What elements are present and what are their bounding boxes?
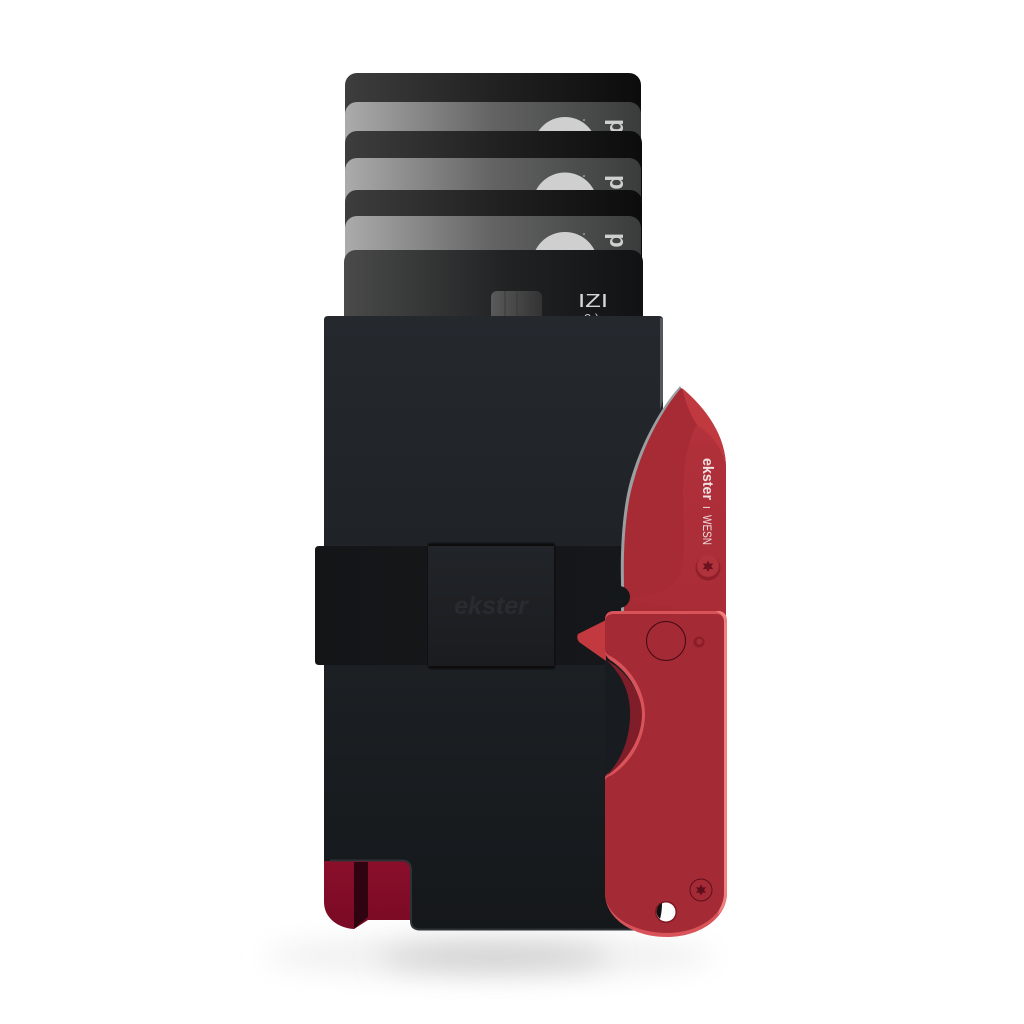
front card with chip	[344, 250, 643, 316]
wallet edge highlight	[660, 318, 663, 410]
product illustration	[296, 73, 727, 986]
handle rim	[605, 611, 727, 937]
wallet body	[324, 316, 663, 930]
elastic band	[315, 546, 625, 665]
handle right highlight	[716, 611, 727, 915]
card 1 light with logo: p	[604, 119, 631, 134]
blade brand text: ekster	[699, 458, 716, 500]
red card slider	[324, 860, 412, 929]
pivot screw	[696, 555, 720, 580]
card stack	[344, 73, 643, 340]
finger notch	[608, 586, 630, 608]
card 2 light with logo: p	[604, 175, 631, 190]
card 3 light with logo	[345, 216, 641, 257]
band clip with logo: ekster	[454, 592, 529, 620]
thumb cutout fill	[605, 660, 630, 776]
blade brand text: I	[700, 506, 711, 509]
guard	[577, 620, 606, 661]
card 3 dark	[345, 190, 642, 258]
card 1 dark	[345, 73, 641, 114]
front card with chip: 2 )	[584, 311, 599, 326]
ground shadow	[265, 936, 715, 976]
card 2 light with logo	[345, 158, 641, 201]
knife	[577, 380, 730, 937]
band clip with logo	[428, 543, 555, 669]
handle screw	[690, 879, 712, 901]
lanyard hole	[655, 901, 677, 923]
blade brand text	[699, 458, 716, 545]
thumb cutout bevel	[606, 660, 642, 776]
small pin	[694, 636, 704, 648]
blade	[621, 380, 730, 615]
card 1 light with logo	[345, 102, 641, 142]
card 3 light with logo: p	[604, 233, 631, 248]
handle face	[605, 614, 724, 933]
front card with chip: IZI	[578, 291, 608, 311]
notch edge	[330, 860, 640, 930]
lock circle	[646, 622, 686, 660]
blade brand text: WESN	[700, 515, 714, 545]
card 2 dark	[345, 131, 642, 202]
